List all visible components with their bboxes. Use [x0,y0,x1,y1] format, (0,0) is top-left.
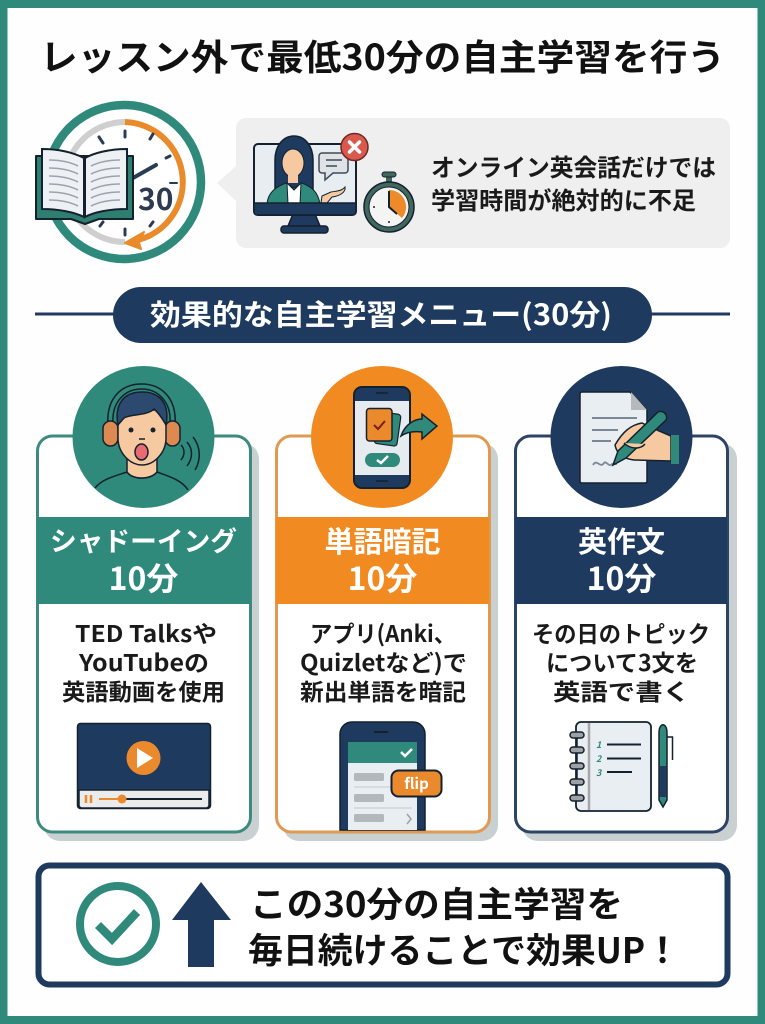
icon: clock with open book: 30 [138,175,173,219]
card description: アプリ(Anki、 [310,615,456,649]
card description: TED Talksや [75,615,217,649]
card header: 10分 [109,554,178,600]
card description: その日のトピック [532,615,710,649]
card header [37,517,250,604]
icon: notebook and pen: 1 [596,738,602,751]
icon: video player [78,724,210,808]
conclusion text: この30分の自主学習を [250,877,623,928]
icon: person with headphones [72,366,214,508]
icon: open book [36,149,133,224]
card description: Quizletなど)で [300,644,467,678]
icon: phone with flashcards [311,366,453,508]
card header [515,517,727,604]
card description: 英語動画を使用 [62,673,225,707]
conclusion text: 毎日続けることで効果UP！ [248,923,680,974]
icon: clock with open book [36,105,201,259]
callout text [431,148,716,216]
panel: conclusion banner [38,866,728,984]
icon: check mark circle [80,886,156,962]
icon: online teacher monitor [254,134,368,233]
section heading: self-study menu: 効果的な自主学習メニュー(30分) [150,292,612,334]
icon: notebook and pen [570,722,672,811]
panel: composition [515,366,737,841]
card header: 単語暗記 [324,519,441,561]
card description: YouTubeの [78,644,209,678]
section heading: self-study menu [35,287,730,343]
card header: シャドーイング [50,520,237,559]
title: レッスン外で最低30分の自主学習を行う [40,29,725,81]
icon: hand writing on paper [550,366,692,508]
card header: 10分 [348,554,417,600]
card description [532,615,710,707]
panel: lack of study time callout [217,118,730,248]
conclusion text [248,877,680,974]
card description: について3文を [546,644,698,678]
card header: 10分 [587,554,656,600]
icon: phone with flip button: flip [404,773,429,794]
card description [300,615,467,707]
card description [62,615,225,707]
icon: up arrow [172,882,231,967]
icon: stopwatch [364,172,414,232]
icon: phone with flip button [340,722,442,830]
panel: vocabulary [276,366,498,841]
card header: 英作文 [578,519,665,561]
callout text: 学習時間が絶対的に不足 [431,181,696,216]
icon: notebook and pen: 3 [596,766,603,779]
card description: 英語で書く [553,673,690,707]
card description: 新出単語を暗記 [300,673,466,707]
icon: notebook and pen: 2 [596,752,603,765]
callout text: オンライン英会話だけでは [431,148,716,183]
panel: shadowing [37,366,259,841]
card header [276,517,489,604]
